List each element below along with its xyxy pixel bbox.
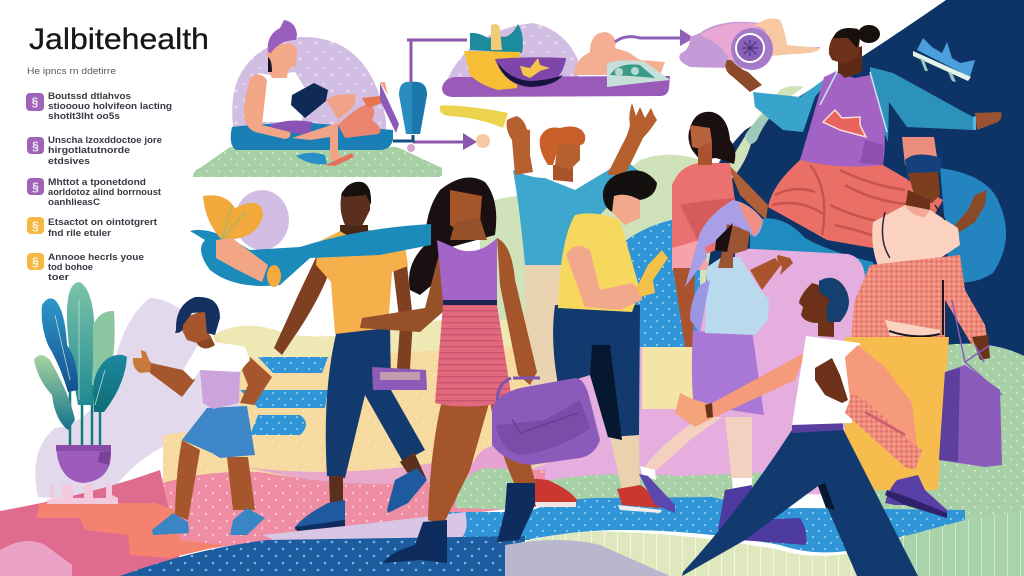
green dotted knoll [455,468,530,510]
food shelf [442,23,681,97]
pink dotted path [150,468,545,552]
list item 5: tod bohoe [48,262,93,272]
blue dotted stair bars [240,357,328,435]
hand with flower scene [190,190,431,287]
person: walking man foreground [675,278,922,576]
person: yellow shirt woman legs [609,433,662,513]
person: long hair woman [672,112,768,347]
list item 3: oanhlieasС [48,197,101,207]
person: purple top woman [360,178,537,563]
person: woman with wrap [639,200,806,545]
green dotted strip [540,472,775,505]
list item 4: Etsactot on ointotgrert [48,217,157,227]
grey lavender patch [505,540,670,576]
list item 2: Unscha lzoxddoctoe jore [48,135,162,145]
list item 2: hirgotlatutnorde [48,145,130,155]
list item 4: fnd rile etuler [48,228,112,238]
navy backdrop [680,0,1024,356]
lavender hill [35,298,260,503]
blue cushion [940,168,1006,283]
salmon terraces [36,503,225,558]
list item 1: stiooouo holvifeon lacting [48,101,172,111]
list item 5: § [32,255,39,269]
list item 3: Mhttot a tponetdond [48,177,146,187]
list item 5 [27,252,144,282]
blue dotted patch under woman [445,512,530,540]
pale green hill [480,86,804,340]
list item 5: Annooe hecrls youe [48,252,144,262]
person: yellow shirt woman upper [553,170,668,440]
sage field right [860,344,1024,576]
pale yellow block [642,347,694,409]
person: yellow shirt man [274,182,427,531]
pink corner [0,541,72,576]
pink knoll [470,445,530,480]
plant [34,282,127,504]
list item 4: § [32,219,39,233]
purple bag [492,378,600,465]
list item 1: shotlt3lht oo5s [48,111,120,121]
sage striped ground [895,510,1024,576]
list item 3: aorldotoz alind borrnoust [48,187,161,197]
pale lime top of field [213,320,545,360]
banana [440,105,508,128]
list item 3: § [32,180,39,194]
list item 1: § [32,95,39,109]
title: Jalbitehealth [29,23,209,56]
list item 1: Boutssd dtlahvos [48,91,131,101]
dark blue dotted road [120,536,525,576]
list item 2: etdsives [48,156,90,166]
pale green hill shadow [745,100,785,144]
pink hill lower left [0,470,180,576]
white wave [118,447,163,500]
arrowhead [680,29,694,46]
subtitle: He ipncs rn ddetirre [27,66,116,76]
funnel and connector lines [393,40,490,152]
blue dotted block [620,215,700,347]
list item 2: § [32,139,39,153]
pale pink band [250,462,500,484]
list item 3 [27,177,161,207]
person: right figure with hat [845,137,1002,518]
list item 1 [26,91,172,121]
person: top right woman [725,25,1002,248]
lilac field [530,290,865,495]
blue band [750,218,880,292]
pale yellow field [163,320,545,490]
leaf bar icon [913,38,975,82]
list item 2 [27,135,162,166]
blue dotted river [525,497,965,552]
fruit blob [679,18,820,70]
person: boy [133,297,272,535]
pale lavender road [262,512,467,550]
list item 5: toer [48,272,70,282]
pale green striped ground [512,531,905,576]
list item 4 [27,217,157,238]
reclining woman scene [193,20,442,177]
person: raised arms man [507,103,657,507]
lilac panel [735,248,865,345]
